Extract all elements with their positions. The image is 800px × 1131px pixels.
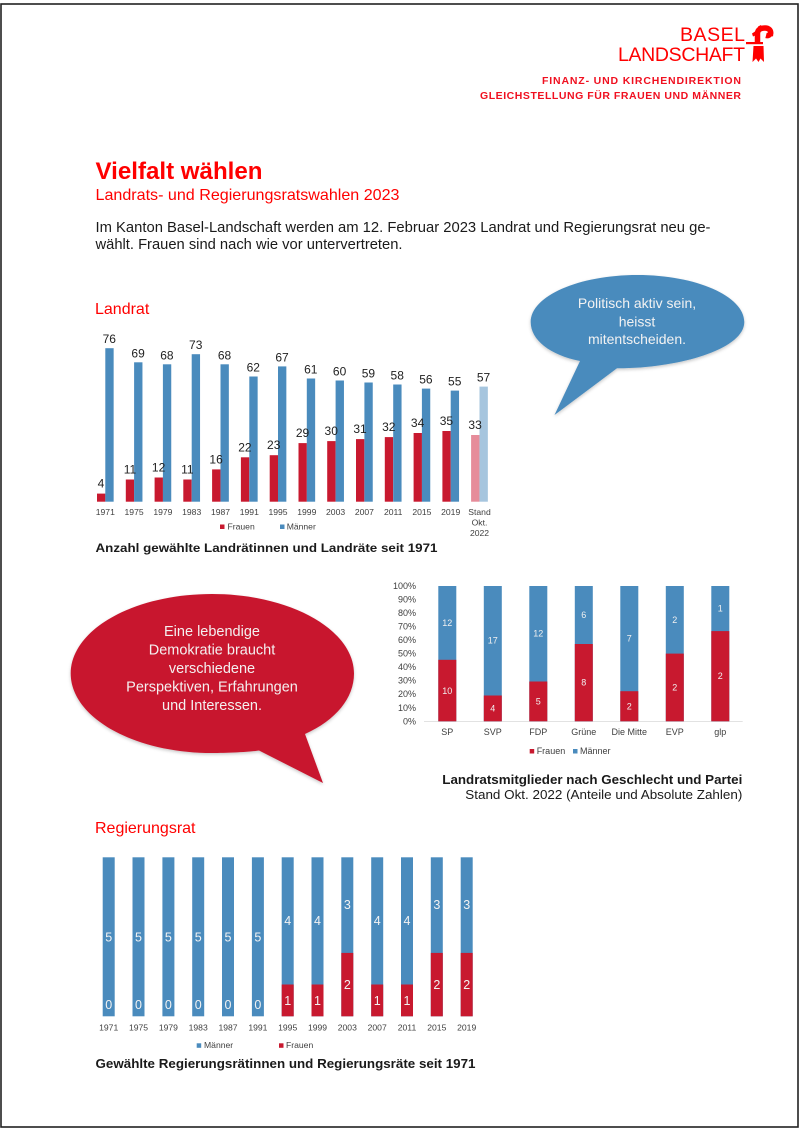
y axis labels: 30% bbox=[398, 676, 416, 686]
bars: Frauen bbox=[97, 431, 479, 502]
callout: red speech bubble bbox=[71, 594, 354, 783]
in-bar values: 4 bbox=[314, 914, 321, 928]
year axis labels: 2007 bbox=[355, 507, 374, 517]
in-bar values: 1 bbox=[314, 994, 321, 1008]
chart caption: party bbox=[442, 772, 742, 802]
y axis labels: 60% bbox=[398, 635, 416, 645]
legend: Frauen bbox=[228, 521, 255, 531]
value labels: Männer: 68 bbox=[218, 348, 231, 362]
y axis labels: 80% bbox=[398, 608, 416, 618]
in-bar values: 12 bbox=[533, 629, 543, 639]
bars: Frauen share bbox=[438, 631, 729, 721]
y axis labels: 40% bbox=[398, 662, 416, 672]
party labels: Die Mitte bbox=[612, 727, 647, 737]
year axis labels: 1983 bbox=[182, 507, 201, 517]
callout: red speech bubble: Perspektiven, Erfahrungen bbox=[126, 680, 298, 696]
year axis labels: 1975 bbox=[129, 1023, 148, 1033]
intro text: wählt. Frauen sind nach wie vor untervertreten. bbox=[94, 237, 402, 253]
legend bbox=[197, 1040, 313, 1050]
party labels bbox=[441, 727, 726, 737]
in-bar values: 5 bbox=[165, 931, 172, 945]
y axis labels: 90% bbox=[398, 594, 416, 604]
year axis labels: 1987 bbox=[211, 507, 230, 517]
in-bar values: 12 bbox=[442, 618, 452, 628]
year axis labels: 1971 bbox=[99, 1023, 118, 1033]
in-bar values: 2 bbox=[627, 701, 632, 711]
in-bar values: 17 bbox=[488, 636, 498, 646]
legend: Männer bbox=[287, 521, 316, 531]
chart caption: party: Landratsmitglieder nach Geschlecht und Partei bbox=[442, 772, 742, 787]
in-bar values: 8 bbox=[581, 678, 586, 688]
value labels: Frauen: 22 bbox=[238, 440, 252, 454]
legend: Männer bbox=[580, 746, 611, 756]
value labels: Frauen: 11 bbox=[181, 462, 194, 476]
party labels: glp bbox=[714, 727, 726, 737]
in-bar values: 2 bbox=[672, 615, 677, 625]
title: Vielfalt wählen bbox=[96, 158, 262, 185]
value labels: Männer: 60 bbox=[333, 364, 347, 378]
callout: blue speech bubble: Politisch aktiv sein, bbox=[578, 295, 696, 311]
callout: red speech bubble: verschiedene bbox=[169, 661, 255, 677]
year axis labels: Okt. bbox=[472, 518, 487, 528]
year axis labels: 2011 bbox=[398, 1023, 416, 1033]
in-bar values: 0 bbox=[225, 998, 232, 1012]
in-bar values: 2 bbox=[344, 978, 351, 992]
value labels: Männer: 59 bbox=[362, 366, 375, 380]
year axis labels: 2019 bbox=[457, 1023, 476, 1033]
chart caption: Landrat: Anzahl gewählte Landrätinnen und Landräte seit 1971 bbox=[96, 541, 438, 555]
in-bar values: 2 bbox=[433, 978, 440, 992]
value labels: Männer: 68 bbox=[160, 348, 174, 362]
y axis labels: 50% bbox=[398, 649, 416, 659]
y axis labels: 0% bbox=[403, 716, 416, 726]
in-bar values: 1 bbox=[284, 994, 291, 1008]
year axis labels bbox=[99, 1023, 476, 1033]
callout: blue speech bubble: heisst bbox=[619, 314, 655, 330]
callout: red speech bubble: Demokratie braucht bbox=[149, 642, 275, 658]
in-bar values: 5 bbox=[135, 931, 142, 945]
year axis labels: 2007 bbox=[368, 1023, 387, 1033]
year axis labels: 2003 bbox=[326, 507, 345, 517]
year axis labels: 2015 bbox=[427, 1023, 447, 1033]
party labels: SP bbox=[441, 727, 453, 737]
in-bar values: 2 bbox=[672, 682, 677, 692]
value labels: Männer: 57 bbox=[477, 371, 490, 385]
in-bar values: 5 bbox=[195, 931, 202, 945]
value labels: Männer: 69 bbox=[131, 346, 145, 360]
heading: Regierungsrat: Regierungsrat bbox=[95, 820, 196, 837]
in-bar values: 5 bbox=[536, 696, 541, 706]
in-bar values: 5 bbox=[254, 931, 261, 945]
in-bar values: 5 bbox=[105, 931, 112, 945]
intro text: Im Kanton Basel-Landschaft werden am 12. Februar 2023 Landrat und Regierungsrat neu ge- bbox=[96, 220, 711, 236]
value labels: Frauen: 11 bbox=[124, 462, 137, 476]
in-bar values: 4 bbox=[374, 914, 381, 928]
value labels: Männer: 56 bbox=[419, 373, 433, 387]
in-bar values: 3 bbox=[344, 898, 351, 912]
year axis labels: 2015 bbox=[412, 507, 432, 517]
value labels: Männer: 55 bbox=[448, 375, 462, 389]
chart caption: party: Stand Okt. 2022 (Anteile und Absolute Zahlen) bbox=[465, 787, 742, 802]
party labels: EVP bbox=[666, 727, 684, 737]
value labels: Frauen: 30 bbox=[325, 424, 338, 438]
year axis labels: 1975 bbox=[125, 507, 144, 517]
in-bar values bbox=[105, 898, 470, 1012]
stacked bar chart: Regierungsrat since 1971 bbox=[99, 857, 476, 1050]
year axis labels: 1995 bbox=[268, 507, 288, 517]
bars: Männer share bbox=[438, 586, 729, 721]
value labels: Frauen: 12 bbox=[152, 460, 166, 474]
callout: blue speech bubble: mitentscheiden. bbox=[588, 331, 686, 347]
in-bar values: 2 bbox=[718, 671, 723, 681]
value labels: Frauen: 31 bbox=[353, 422, 367, 436]
in-bar values: 4 bbox=[490, 703, 495, 713]
value labels: Frauen: 35 bbox=[440, 414, 453, 428]
value labels: Frauen: 23 bbox=[267, 438, 281, 452]
department lines: GLEICHSTELLUNG FÜR FRAUEN UND MÄNNER bbox=[480, 89, 741, 102]
y axis labels: 100% bbox=[393, 581, 416, 591]
in-bar values: 5 bbox=[225, 931, 232, 945]
value labels: Frauen: 4 bbox=[98, 477, 105, 491]
icon: crozier bbox=[746, 25, 774, 62]
in-bar values: 3 bbox=[463, 898, 470, 912]
y axis labels: 20% bbox=[398, 689, 416, 699]
y axis labels: 10% bbox=[398, 703, 416, 713]
in-bar values: 4 bbox=[284, 914, 291, 928]
bars: Männer bbox=[105, 348, 488, 502]
intro text bbox=[94, 220, 711, 253]
year axis labels: 1999 bbox=[308, 1023, 327, 1033]
stacked bar chart: Landrat members by party bbox=[393, 581, 743, 756]
value labels: Frauen: 34 bbox=[411, 416, 425, 430]
legend bbox=[530, 746, 611, 756]
subtitle: Landrats- und Regierungsratswahlen 2023 bbox=[96, 187, 400, 204]
chart caption: Regierungsrat: Gewählte Regierungsrätinnen und Regierungsräte seit 1971 bbox=[96, 1056, 475, 1071]
party labels: Grüne bbox=[571, 727, 596, 737]
y axis labels bbox=[393, 581, 416, 726]
value labels: Männer: 67 bbox=[275, 350, 289, 364]
legend bbox=[220, 521, 316, 531]
year axis labels: 1983 bbox=[189, 1023, 208, 1033]
year axis labels: 1979 bbox=[159, 1023, 178, 1033]
legend: Frauen bbox=[537, 746, 565, 756]
in-bar values: 10 bbox=[442, 686, 452, 696]
bar chart: Landrat seats since 1971 bbox=[96, 332, 491, 538]
callout: red speech bubble: Eine lebendige bbox=[164, 624, 260, 640]
in-bar values: 7 bbox=[627, 634, 632, 644]
in-bar values: 0 bbox=[254, 998, 261, 1012]
callout: blue speech bubble bbox=[531, 275, 744, 415]
year axis labels: 1971 bbox=[96, 507, 115, 517]
year axis labels: Stand bbox=[468, 507, 491, 517]
bars: Frauen bbox=[282, 953, 473, 1016]
year axis labels: 2019 bbox=[441, 507, 460, 517]
value labels: Männer: 73 bbox=[189, 338, 203, 352]
in-bar values: 1 bbox=[374, 994, 381, 1008]
year axis labels: 2003 bbox=[338, 1023, 357, 1033]
in-bar values: 1 bbox=[404, 994, 411, 1008]
in-bar values: 0 bbox=[165, 998, 172, 1012]
value labels: Frauen: 33 bbox=[468, 418, 482, 432]
value labels: Männer bbox=[103, 332, 490, 389]
year axis labels: 2022 bbox=[470, 528, 489, 538]
in-bar values: 0 bbox=[135, 998, 142, 1012]
in-bar values: 6 bbox=[581, 610, 586, 620]
year axis labels: 1987 bbox=[218, 1023, 238, 1033]
value labels: Männer: 76 bbox=[103, 332, 116, 346]
logo: Basel-Landschaft: LANDSCHAFT bbox=[618, 44, 745, 66]
in-bar values: 4 bbox=[404, 914, 411, 928]
legend: Männer bbox=[204, 1040, 233, 1050]
y axis labels: 70% bbox=[398, 622, 416, 632]
logo: Basel-Landschaft: BASEL bbox=[680, 24, 745, 46]
value labels: Männer: 62 bbox=[247, 360, 260, 374]
value labels: Frauen: 32 bbox=[382, 420, 396, 434]
value labels: Frauen bbox=[98, 414, 482, 491]
year axis labels: 1999 bbox=[297, 507, 317, 517]
value labels: Männer: 58 bbox=[391, 368, 404, 382]
in-bar values: 1 bbox=[718, 604, 723, 614]
value labels: Männer: 61 bbox=[304, 362, 318, 376]
value labels: Frauen: 29 bbox=[296, 426, 309, 440]
value labels: Frauen: 16 bbox=[209, 452, 223, 466]
year axis labels: 1995 bbox=[278, 1023, 297, 1033]
department lines bbox=[480, 75, 741, 102]
bars: Männer bbox=[103, 857, 473, 1016]
year axis labels: 2011 bbox=[384, 507, 403, 517]
logo: Basel-Landschaft bbox=[618, 24, 774, 66]
year axis labels bbox=[96, 507, 491, 538]
in-bar values: 2 bbox=[463, 978, 470, 992]
heading: Landrat: Landrat bbox=[95, 301, 150, 318]
in-bar values bbox=[442, 604, 723, 713]
party labels: FDP bbox=[529, 727, 547, 737]
year axis labels: 1991 bbox=[248, 1023, 268, 1033]
department lines: FINANZ- UND KIRCHENDIREKTION bbox=[542, 75, 741, 87]
in-bar values: 0 bbox=[195, 998, 202, 1012]
year axis labels: 1979 bbox=[153, 507, 173, 517]
year axis labels: 1991 bbox=[240, 507, 259, 517]
in-bar values: 0 bbox=[105, 998, 112, 1012]
in-bar values: 3 bbox=[433, 898, 440, 912]
party labels: SVP bbox=[484, 727, 502, 737]
callout: red speech bubble: und Interessen. bbox=[162, 698, 262, 714]
legend: Frauen bbox=[286, 1040, 313, 1050]
